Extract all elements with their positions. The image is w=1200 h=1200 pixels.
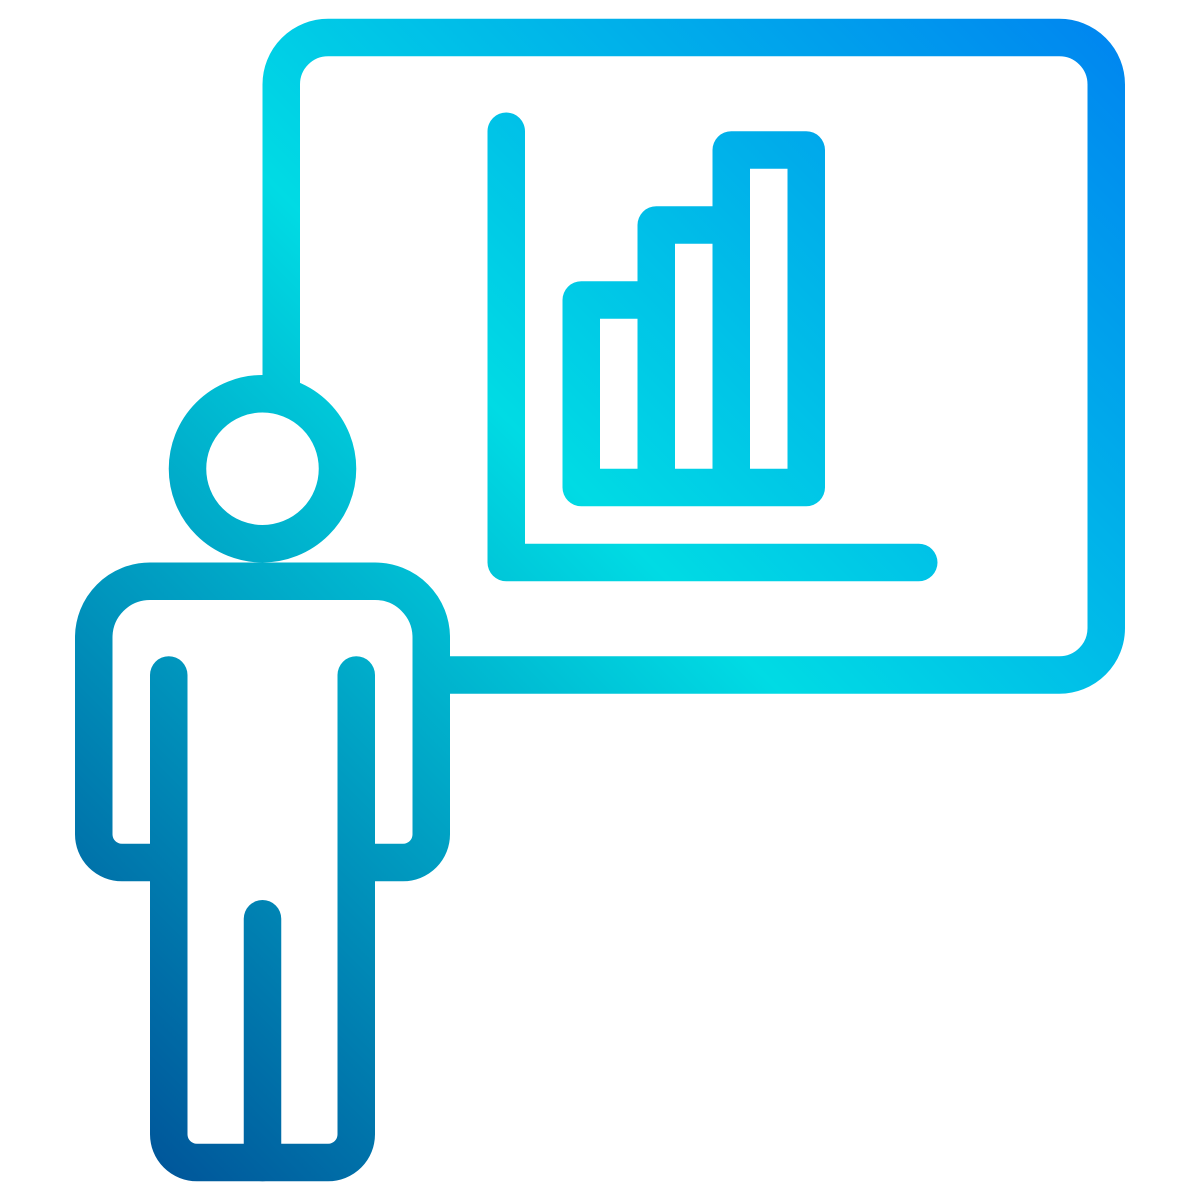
presenter head	[188, 394, 338, 544]
presentation board frame	[281, 38, 1106, 675]
inner leg line	[244, 919, 281, 1162]
legs outline	[169, 675, 356, 1162]
chart axes	[506, 131, 919, 562]
presenter body	[94, 581, 431, 1162]
torso and arms outline	[94, 581, 431, 862]
bar chart	[581, 150, 806, 488]
